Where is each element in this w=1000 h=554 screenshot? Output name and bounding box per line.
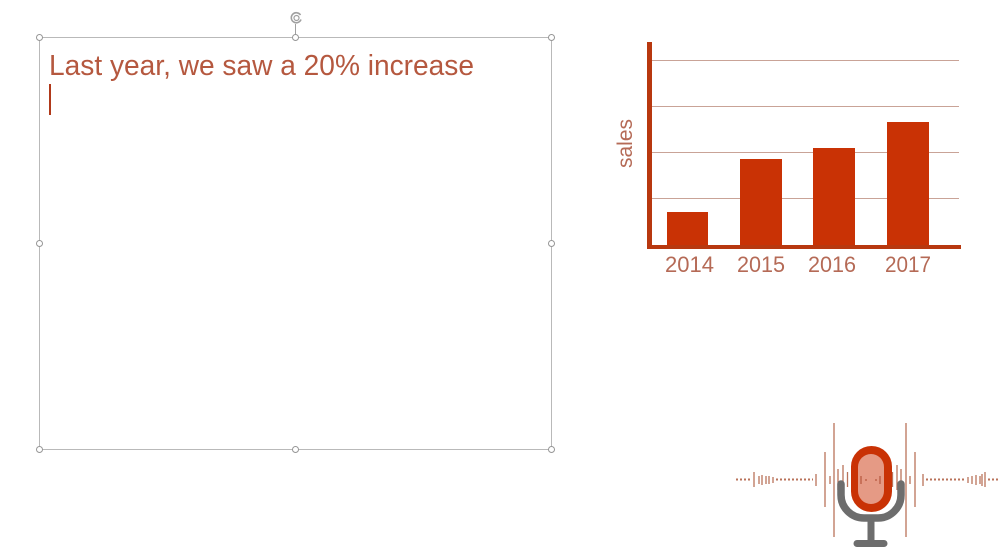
y axis label: sales (614, 119, 637, 168)
panel: slide text box with selection handles (36, 13, 554, 453)
x axis labels (665, 252, 931, 277)
x axis labels: 2014 (665, 252, 714, 277)
x axis labels: 2016 (808, 252, 856, 277)
text cursor (49, 84, 51, 115)
capsule centre ticks (861, 476, 880, 484)
icon: microphone with sound waves (736, 423, 999, 544)
x axis labels: 2015 (737, 252, 785, 277)
microphone capsule (851, 446, 892, 512)
heading text: Last year, we saw a 20% increase (49, 50, 474, 82)
bars (667, 122, 929, 246)
sound waveform (736, 423, 999, 537)
axes (647, 42, 961, 249)
x axis labels: 2017 (885, 252, 931, 277)
microphone stand (841, 484, 901, 544)
icon: rotate handle (291, 13, 301, 37)
bar chart: sales by year (614, 42, 961, 277)
